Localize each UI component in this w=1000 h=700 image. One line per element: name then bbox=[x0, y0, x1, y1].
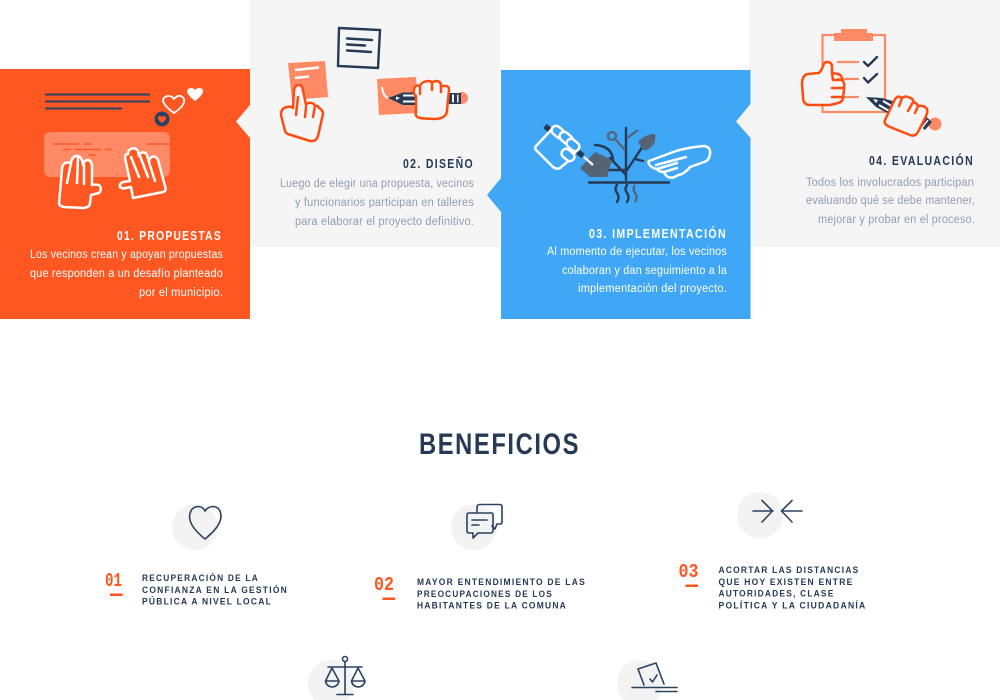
text: benefit 01: PÚBLICA A NIVEL LOCAL bbox=[142, 596, 272, 608]
panel: 02 diseño bbox=[250, 0, 500, 247]
number 02: 02 bbox=[374, 574, 394, 596]
benefit 02 bbox=[374, 504, 586, 612]
number 01 bbox=[105, 570, 122, 596]
text: benefit 03: AUTORIDADES, CLASE bbox=[718, 588, 834, 600]
text: benefit 02: MAYOR ENTENDIMIENTO DE LAS bbox=[417, 577, 586, 588]
text: implementación description: colaboran y dan seguimiento a la bbox=[562, 265, 727, 277]
icon: ballot box bbox=[617, 660, 677, 700]
icon: left hand bbox=[59, 156, 101, 208]
text: implementación description: implementación del proyecto. bbox=[578, 283, 727, 295]
text: benefit 03: ACORTAR LAS DISTANCIAS bbox=[718, 565, 860, 576]
text: implementación description bbox=[547, 246, 727, 295]
icon: hearts bbox=[154, 88, 203, 126]
icon: heart bbox=[172, 504, 221, 550]
icon: keyboard bbox=[44, 132, 170, 177]
text: propuestas description bbox=[30, 249, 223, 299]
benefit 01 bbox=[105, 504, 288, 608]
text: diseño description: y funcionarios participan en talleres bbox=[295, 197, 474, 209]
icon: plant bbox=[589, 128, 669, 202]
text: benefit 02: PREOCUPACIONES DE LOS bbox=[417, 589, 553, 600]
text: propuestas description: Los vecinos crean y apoyan propuestas bbox=[30, 249, 223, 261]
text: diseño description bbox=[280, 178, 474, 228]
text: benefit 02 bbox=[417, 577, 586, 612]
text: propuestas description: por el municipio. bbox=[139, 287, 223, 299]
icon: open hand bbox=[648, 146, 710, 178]
icon: dark note bbox=[338, 28, 380, 68]
text: evaluación description: Todos los involucrados participan bbox=[806, 177, 974, 189]
icon: pointing hand on note bbox=[281, 61, 328, 141]
text: diseño description: para elaborar el proyecto definitivo. bbox=[295, 216, 474, 228]
benefit 03 bbox=[678, 492, 866, 612]
text: benefit 01: CONFIANZA EN LA GESTIÓN bbox=[142, 584, 288, 596]
text: implementación description: Al momento de ejecutar, los vecinos bbox=[547, 246, 727, 258]
text: benefit 03 bbox=[718, 565, 866, 612]
text: benefit 02: HABITANTES DE LA COMUNA bbox=[417, 600, 567, 612]
heading: 04. evaluación: 04. EVALUACIÓN bbox=[869, 153, 974, 168]
text: benefit 01 bbox=[142, 572, 288, 608]
text: benefit 03: POLÍTICA Y LA CIUDADANÍA bbox=[718, 600, 866, 612]
number 01: 01 bbox=[105, 570, 122, 592]
icon: converging arrows bbox=[737, 492, 802, 538]
heading: 01. propuestas: 01. PROPUESTAS bbox=[117, 229, 222, 243]
panel: 01 propuestas bbox=[0, 69, 250, 319]
icon: scales of justice bbox=[308, 656, 365, 700]
text: benefit 03: QUE HOY EXISTEN ENTRE bbox=[718, 577, 854, 588]
text: diseño description: Luego de elegir una propuesta, vecinos bbox=[280, 178, 474, 190]
icon: clipboard checklist bbox=[822, 29, 885, 112]
icon: chat bubbles bbox=[451, 504, 502, 550]
panel: 03 implementación bbox=[487, 70, 750, 319]
icon: trowel bbox=[580, 152, 612, 177]
icon: right hand bbox=[120, 148, 166, 198]
icon: thumbs up hand bbox=[802, 62, 844, 105]
icon: hand drawing with pencil bbox=[377, 77, 468, 119]
icon: text lines bbox=[45, 94, 150, 108]
text: evaluación description: evaluando qué se debe mantener, bbox=[806, 195, 975, 207]
text: evaluación description bbox=[806, 177, 975, 226]
text: evaluación description: mejorar y probar en el proceso. bbox=[818, 214, 975, 226]
heading: 02. diseño: 02. DISEÑO bbox=[403, 156, 474, 171]
heading: 03. implementación: 03. IMPLEMENTACIÓN bbox=[589, 226, 727, 241]
panel: 04 evaluación bbox=[749, 0, 1000, 247]
text: propuestas description: que responden a un desafío planteado bbox=[30, 268, 223, 280]
heading: beneficios: BENEFICIOS bbox=[419, 428, 580, 461]
icon: hand with pencil bbox=[866, 96, 942, 136]
text: benefit 01: RECUPERACIÓN DE LA bbox=[142, 572, 259, 584]
icon: hand holding trowel bbox=[535, 124, 593, 169]
number 03: 03 bbox=[678, 561, 698, 583]
